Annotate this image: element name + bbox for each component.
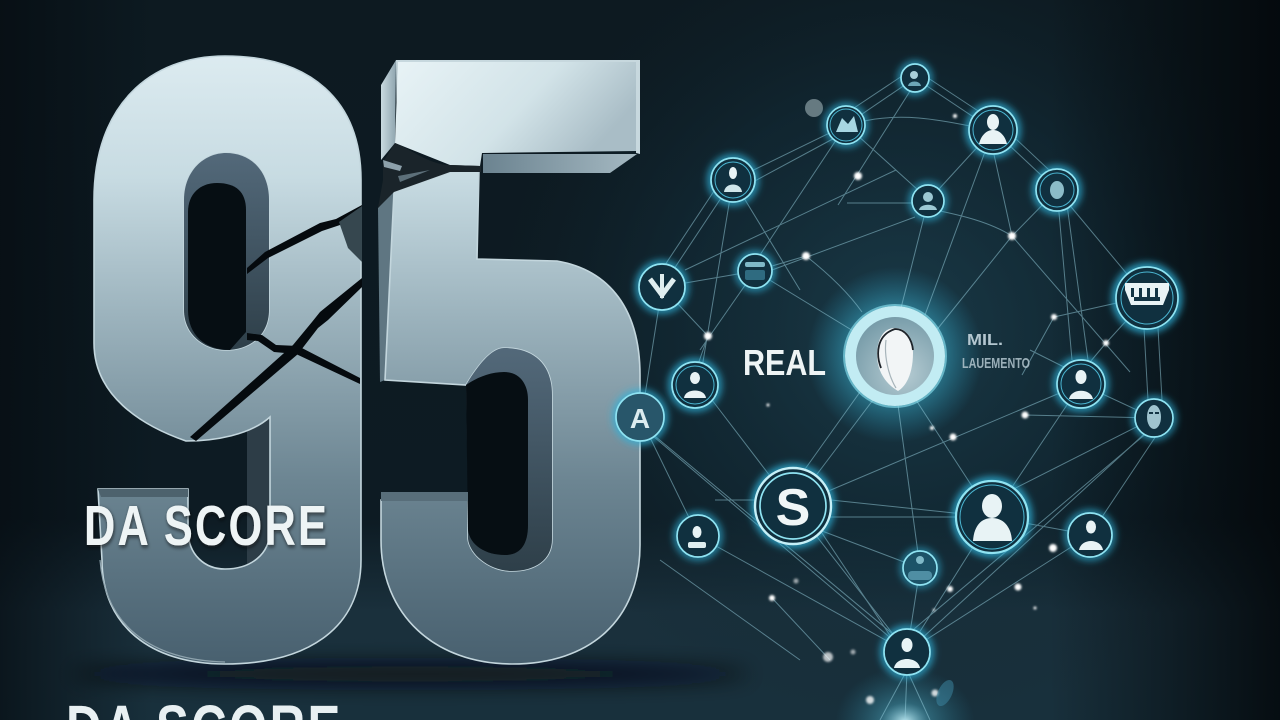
cracks [190,143,481,441]
central node: REAL hub [844,305,946,407]
node: letter A: A [630,403,650,434]
small network junction dots [704,114,1109,709]
node: upper person [969,106,1017,154]
node: crown shield icon [1116,267,1178,329]
digit 5 [378,60,640,664]
network connection lines [640,72,1162,720]
icon: gray planet [805,99,823,117]
node: top [901,64,929,92]
node: right person [1057,360,1105,408]
node: large person [956,481,1028,553]
node: dollar S [755,468,831,544]
node: inner person [912,185,944,217]
node: bottom person [884,629,930,675]
caption line 2: LAUEMENTO [962,355,1030,372]
digit 9 [94,56,361,664]
node: dollar S: S [776,479,810,537]
caption line 1: MIL. [967,332,1003,349]
big number 95 [94,56,640,664]
node: folder icon [738,254,772,288]
node: left person [672,362,718,408]
label: DA SCORE on digit: DA SCORE [84,493,329,557]
node: robot face [1036,169,1078,211]
node: branch icon [639,264,685,310]
node: small bubble [903,551,937,585]
hub label: REAL: REAL [743,342,826,383]
node: lower left person [677,515,719,557]
bottom light glow [835,667,975,720]
node: left person emblem [711,158,755,202]
node: upper left cloud icon [827,106,865,144]
hub caption [962,332,1030,372]
node: letter A [616,393,664,441]
node: lower right person [1068,513,1112,557]
central halo [807,267,983,443]
node: mask face [1135,399,1173,437]
